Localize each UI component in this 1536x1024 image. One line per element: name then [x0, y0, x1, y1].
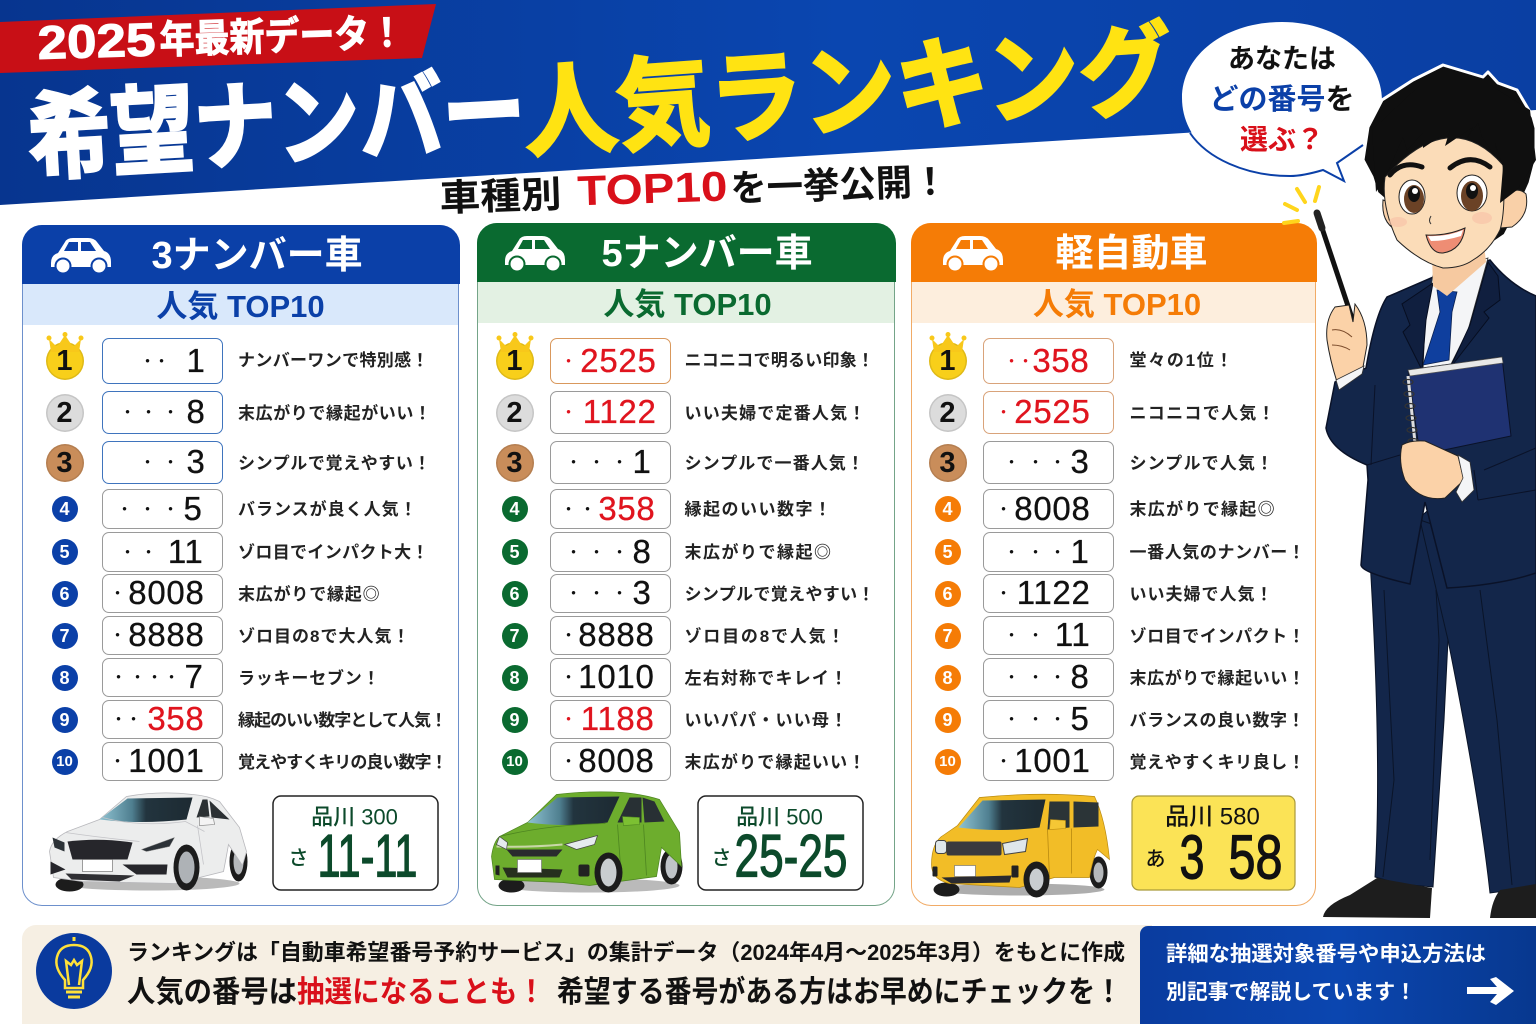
- row 2: [46, 391, 432, 434]
- row 6: •: [1001, 585, 1006, 600]
- note line 2: 人気の番号は: [127, 976, 297, 1009]
- row 9: [502, 700, 848, 739]
- note line 1: ランキングは「自動車希望番号予約サービス」の集計データ（2024年4月～2025年3月）をもとに作成: [127, 940, 1125, 965]
- title: 希望ナンバー人気ランキング: [25, 14, 1176, 193]
- icon: white sedan: [50, 793, 248, 892]
- eyebrows: [1390, 160, 1490, 175]
- row 2: [929, 391, 1276, 434]
- row 1: •: [159, 353, 164, 368]
- license plate: 品川 300 11-11: 品川 300: [311, 804, 398, 830]
- row 9: •: [1055, 711, 1060, 726]
- bottom note strip: [22, 925, 1152, 1024]
- shoes: [1323, 878, 1536, 918]
- row 2: 2: [56, 396, 73, 428]
- row 6: 6: [59, 584, 70, 604]
- row 9: 9: [942, 710, 952, 730]
- row 2: •: [146, 404, 151, 419]
- row 4: •: [122, 501, 127, 516]
- row 10: 10: [56, 752, 73, 770]
- CTA text: 詳細な抽選対象番号や申込方法は: [1166, 943, 1486, 966]
- nose: [1430, 216, 1431, 224]
- row 5: [52, 532, 429, 572]
- row 5: •: [146, 544, 151, 559]
- subtitle: 車種別 TOP10 を一挙公開: 車種別: [439, 174, 562, 219]
- ribbon: 2025年最新データ: [0, 4, 436, 73]
- ribbon: 2025年最新データ: 年最新データ！: [159, 11, 405, 62]
- row 8: •: [1033, 669, 1038, 684]
- ears: [1383, 200, 1397, 230]
- row 4: [935, 489, 1276, 529]
- row 1: 1: [56, 345, 73, 377]
- row 10: 10: [939, 752, 956, 770]
- row 5: 1: [1070, 533, 1090, 570]
- row 2: •: [125, 404, 130, 419]
- row 3: シンプルで覚えやすい！: [238, 454, 431, 473]
- row 6: 3: [632, 574, 652, 611]
- panel header: 軽自動車: [1056, 232, 1208, 274]
- bubble text: どの番号を: [1209, 83, 1355, 116]
- license plate: 品川 580 3 58: 58: [1228, 824, 1282, 892]
- icon: green hatchback: [492, 792, 682, 892]
- row 7: [52, 616, 410, 655]
- pointer: [1317, 213, 1352, 318]
- row 7: [935, 616, 1306, 655]
- row 6: •: [571, 585, 576, 600]
- row 3: •: [168, 454, 173, 469]
- row 5: 5: [509, 542, 520, 562]
- subtitle: 車種別 TOP10 を一挙公開: TOP10: [577, 162, 728, 214]
- subtitle: 車種別 TOP10 を一挙公開: を一挙公開！: [730, 161, 949, 209]
- row 9: 5: [1070, 700, 1090, 737]
- row 7: 7: [509, 626, 520, 646]
- row 9: 縁起のいい数字として人気！: [238, 711, 446, 730]
- row 1: 2525: [580, 342, 656, 379]
- row 5: •: [571, 544, 576, 559]
- bubble text: あなたは: [1228, 44, 1336, 74]
- row 3: 3: [186, 443, 206, 480]
- row 1: •: [1009, 353, 1014, 368]
- license plate: 品川 500 25-25: [698, 796, 863, 890]
- row 6: シンプルで覚えやすい！: [684, 585, 875, 604]
- row 4: 4: [942, 499, 952, 519]
- subheading: [912, 282, 1315, 323]
- row 7: [502, 616, 846, 655]
- row 10: 末広がりで縁起いい！: [684, 753, 866, 772]
- row 8: 8: [1070, 658, 1090, 695]
- license plate: 品川 580 3 58: 品川 580: [1165, 804, 1260, 830]
- row 1: 堂々の1位！: [1130, 351, 1234, 370]
- row 5: •: [617, 544, 622, 559]
- row 7: ゾロ目でインパクト！: [1130, 627, 1306, 646]
- row 7: ゾロ目の8で大人気！: [238, 627, 410, 646]
- row 10: 覚えやすくキリの良い数字！: [238, 753, 447, 772]
- row 2: 2525: [1014, 393, 1090, 430]
- row 9: [935, 700, 1305, 739]
- row 9: いいパパ・いい母！: [684, 711, 848, 730]
- row 1: 1: [939, 345, 956, 377]
- row 2: [496, 391, 866, 434]
- row 4: 縁起のいい数字！: [684, 500, 832, 519]
- head: [1363, 65, 1536, 268]
- row 6: •: [115, 585, 120, 600]
- row 9: 1188: [581, 700, 654, 737]
- row 7: •: [115, 627, 120, 642]
- row 5: •: [594, 544, 599, 559]
- row 8: •: [116, 669, 121, 684]
- row 3: •: [145, 454, 150, 469]
- license plate: 品川 500 25-25: 25-25: [734, 822, 848, 890]
- row 3: [496, 441, 865, 484]
- row 3: [929, 441, 1274, 484]
- CTA text: 別記事で解説しています！: [1166, 980, 1416, 1004]
- row 9: •: [131, 711, 136, 726]
- row 8: 左右対称でキレイ！: [684, 669, 848, 688]
- row 1: •: [145, 353, 150, 368]
- row 6: •: [594, 585, 599, 600]
- row 9: •: [1009, 711, 1014, 726]
- row 1: 358: [1032, 342, 1090, 379]
- row 9: •: [566, 711, 571, 726]
- row 5: 5: [942, 542, 952, 562]
- row 8: 末広がりで縁起いい！: [1130, 669, 1306, 688]
- row 6: 1122: [1017, 574, 1090, 611]
- row 8: [52, 658, 380, 697]
- row 3: シンプルで一番人気！: [684, 454, 865, 473]
- sparkle lines: [1284, 187, 1319, 223]
- mouth: [1426, 228, 1465, 253]
- license plate: 品川 500 25-25: さ: [712, 848, 732, 870]
- car and plate illustration: [49, 792, 439, 892]
- bangs: [1372, 85, 1536, 203]
- subheading: 人気 TOP10: [156, 289, 325, 324]
- row 7: 11: [1055, 616, 1090, 653]
- lapels: [1402, 262, 1500, 370]
- row 1: 1: [186, 342, 206, 379]
- row 8: ラッキーセブン！: [238, 669, 380, 688]
- ribbon: 2025年最新データ: 2025: [37, 13, 156, 69]
- row 2: 2: [939, 396, 956, 428]
- row 5: 8: [632, 533, 652, 570]
- row 9: •: [1033, 711, 1038, 726]
- row 10: •: [566, 753, 571, 768]
- row 5: •: [1033, 544, 1038, 559]
- row 4: •: [1001, 501, 1006, 516]
- row 3: 3: [1070, 443, 1090, 480]
- row 3: 3: [56, 446, 73, 478]
- row 7: •: [1009, 627, 1014, 642]
- row 2: ニコニコで人気！: [1130, 404, 1276, 423]
- row 9: 9: [509, 710, 520, 730]
- row 10: 1001: [128, 742, 204, 779]
- row 10: [935, 742, 1306, 781]
- row 3: •: [594, 454, 599, 469]
- row 4: •: [168, 501, 173, 516]
- row 9: [52, 700, 446, 739]
- row 1: •: [1023, 353, 1028, 368]
- subtitle: 車種別 TOP10 を一挙公開: [439, 161, 949, 219]
- row 1: [496, 332, 874, 384]
- row 10: •: [1001, 753, 1006, 768]
- row 9: 9: [59, 710, 70, 730]
- subheading: [478, 282, 894, 323]
- row 8: •: [1009, 669, 1014, 684]
- row 5: ゾロ目でインパクト大！: [238, 543, 429, 562]
- row 2: 2: [506, 396, 523, 428]
- header background band: [0, 0, 1536, 205]
- license plate: 品川 300 11-11: さ: [288, 848, 308, 870]
- row 1: 1: [506, 345, 523, 377]
- icon: light bulb: [36, 933, 112, 1009]
- trousers: [1370, 500, 1536, 893]
- row 3: 3: [506, 446, 523, 478]
- row 1: ナンバーワンで特別感！: [238, 351, 429, 370]
- row 7: 8888: [578, 616, 654, 653]
- speech bubble: [1182, 22, 1382, 184]
- row 8: 8: [509, 668, 520, 688]
- row 9: バランスの良い数字！: [1130, 711, 1305, 730]
- row 6: 6: [509, 584, 520, 604]
- notebook: [1403, 357, 1511, 455]
- row 8: •: [1055, 669, 1060, 684]
- row 10: •: [115, 753, 120, 768]
- row 4: •: [566, 501, 571, 516]
- row 7: •: [566, 627, 571, 642]
- face: [1384, 138, 1504, 268]
- row 8: 8: [942, 668, 952, 688]
- row 4: 358: [598, 490, 656, 527]
- hair back: [1363, 65, 1536, 250]
- row 6: •: [617, 585, 622, 600]
- row 3: •: [1055, 454, 1060, 469]
- row 2: •: [1001, 404, 1006, 419]
- row 1: [929, 332, 1234, 384]
- row 8: •: [152, 669, 157, 684]
- row 10: [502, 742, 866, 781]
- row 2: 8: [186, 393, 206, 430]
- row 8: 7: [184, 658, 204, 695]
- panel: 軽自動車: [911, 223, 1316, 906]
- row 8: •: [566, 669, 571, 684]
- row 10: 覚えやすくキリ良し！: [1130, 753, 1306, 772]
- row 7: •: [1033, 627, 1038, 642]
- row 6: いい夫婦で人気！: [1130, 585, 1274, 604]
- row 1: [46, 332, 429, 384]
- row 8: •: [169, 669, 174, 684]
- row 5: •: [1055, 544, 1060, 559]
- row 10: 8008: [578, 742, 654, 779]
- row 6: [935, 574, 1274, 613]
- row 7: ゾロ目の8で人気！: [684, 627, 846, 646]
- row 9: 358: [147, 700, 204, 737]
- row 4: 8008: [1014, 490, 1090, 527]
- title: 希望ナンバー人気ランキング: 人気ランキング: [520, 14, 1176, 171]
- row 9: •: [116, 711, 121, 726]
- row 4: 末広がりで縁起◎: [1130, 500, 1276, 519]
- row 3: •: [571, 454, 576, 469]
- row 5: •: [125, 544, 130, 559]
- row 1: ニコニコで明るい印象！: [684, 351, 874, 370]
- holding hand: [1401, 441, 1474, 502]
- car and plate illustration: [491, 792, 864, 892]
- row 2: •: [168, 404, 173, 419]
- bubble text: 選ぶ？: [1240, 124, 1324, 155]
- subheading: [23, 284, 458, 325]
- row 3: •: [617, 454, 622, 469]
- row 3: 1: [632, 443, 652, 480]
- row 1: •: [566, 353, 571, 368]
- bubble text: [1209, 44, 1355, 155]
- panel: 3ナンバー車: [22, 225, 459, 906]
- car and plate illustration: [931, 794, 1296, 898]
- panel: 5ナンバー車: [477, 223, 895, 906]
- row 7: 7: [942, 626, 952, 646]
- panel header: 3ナンバー車: [152, 234, 363, 276]
- raised hand: [1327, 304, 1367, 390]
- row 5: 末広がりで縁起◎: [684, 543, 832, 562]
- row 5: 11: [168, 533, 204, 570]
- row 10: [52, 742, 447, 781]
- license plate: 品川 580 3 58: あ: [1146, 848, 1166, 870]
- row 10: 1001: [1014, 742, 1090, 779]
- row 8: [935, 658, 1306, 697]
- note line 2: 抽選になることも！: [297, 976, 545, 1009]
- shirt and collar: [1423, 258, 1488, 372]
- row 2: 1122: [583, 393, 656, 430]
- row 2: 末広がりで縁起がいい！: [238, 404, 432, 423]
- note line 2: [127, 975, 1122, 1009]
- panel header: [476, 222, 896, 282]
- row 4: •: [145, 501, 150, 516]
- panel header: 5ナンバー車: [602, 232, 813, 274]
- bottom CTA box: [1140, 926, 1536, 1024]
- panel header: [910, 222, 1316, 282]
- row 6: [52, 574, 380, 613]
- row 4: 4: [59, 499, 70, 519]
- necktie: [1423, 290, 1457, 365]
- license plate: 品川 500 25-25: 品川 500: [736, 804, 823, 830]
- icon: yellow kei car: [932, 794, 1110, 898]
- row 6: 8008: [128, 574, 204, 611]
- row 3: 3: [939, 446, 956, 478]
- license plate: 品川 580 3 58: 3: [1180, 824, 1204, 892]
- license plate: 品川 300 11-11: [273, 796, 438, 890]
- row 6: 末広がりで縁起◎: [238, 585, 380, 604]
- row 4: •: [585, 501, 590, 516]
- row 3: •: [1009, 454, 1014, 469]
- row 4: バランスが良く人気！: [238, 500, 418, 519]
- row 7: 8888: [128, 616, 204, 653]
- row 5: [502, 532, 832, 572]
- row 8: 1010: [578, 658, 654, 695]
- row 5: 一番人気のナンバー！: [1130, 543, 1306, 562]
- row 4: 4: [509, 499, 520, 519]
- row 4: 5: [183, 490, 202, 527]
- neck: [1432, 245, 1486, 296]
- row 3: [46, 441, 431, 484]
- row 4: [502, 489, 832, 529]
- row 6: 6: [942, 584, 952, 604]
- row 10: 10: [506, 752, 523, 770]
- panel header: [22, 224, 460, 284]
- row 5: 5: [59, 542, 70, 562]
- eyes: [1399, 175, 1487, 214]
- subheading: 人気 TOP10: [603, 287, 772, 322]
- row 8: •: [135, 669, 140, 684]
- row 5: [935, 532, 1306, 572]
- subheading: 人気 TOP10: [1033, 287, 1201, 322]
- row 7: 7: [59, 626, 70, 646]
- row 2: いい夫婦で定番人気！: [684, 404, 866, 423]
- note line 2: 希望する番号がある方はお早めにチェックを！: [557, 975, 1122, 1009]
- jacket: [1326, 260, 1536, 588]
- row 4: [52, 489, 418, 529]
- license plate: 品川 300 11-11: 11-11: [318, 822, 418, 890]
- row 3: シンプルで人気！: [1130, 454, 1274, 473]
- row 6: [502, 574, 875, 613]
- row 2: •: [566, 404, 571, 419]
- row 8: 8: [59, 668, 70, 688]
- row 5: •: [1009, 544, 1014, 559]
- row 8: [502, 658, 848, 697]
- row 3: •: [1033, 454, 1038, 469]
- CTA text: [1166, 943, 1486, 1004]
- arrow: [1467, 977, 1514, 1005]
- license plate: 品川 580 3 58: [1132, 796, 1295, 892]
- title: 希望ナンバー人気ランキング: 希望ナンバー: [25, 58, 528, 193]
